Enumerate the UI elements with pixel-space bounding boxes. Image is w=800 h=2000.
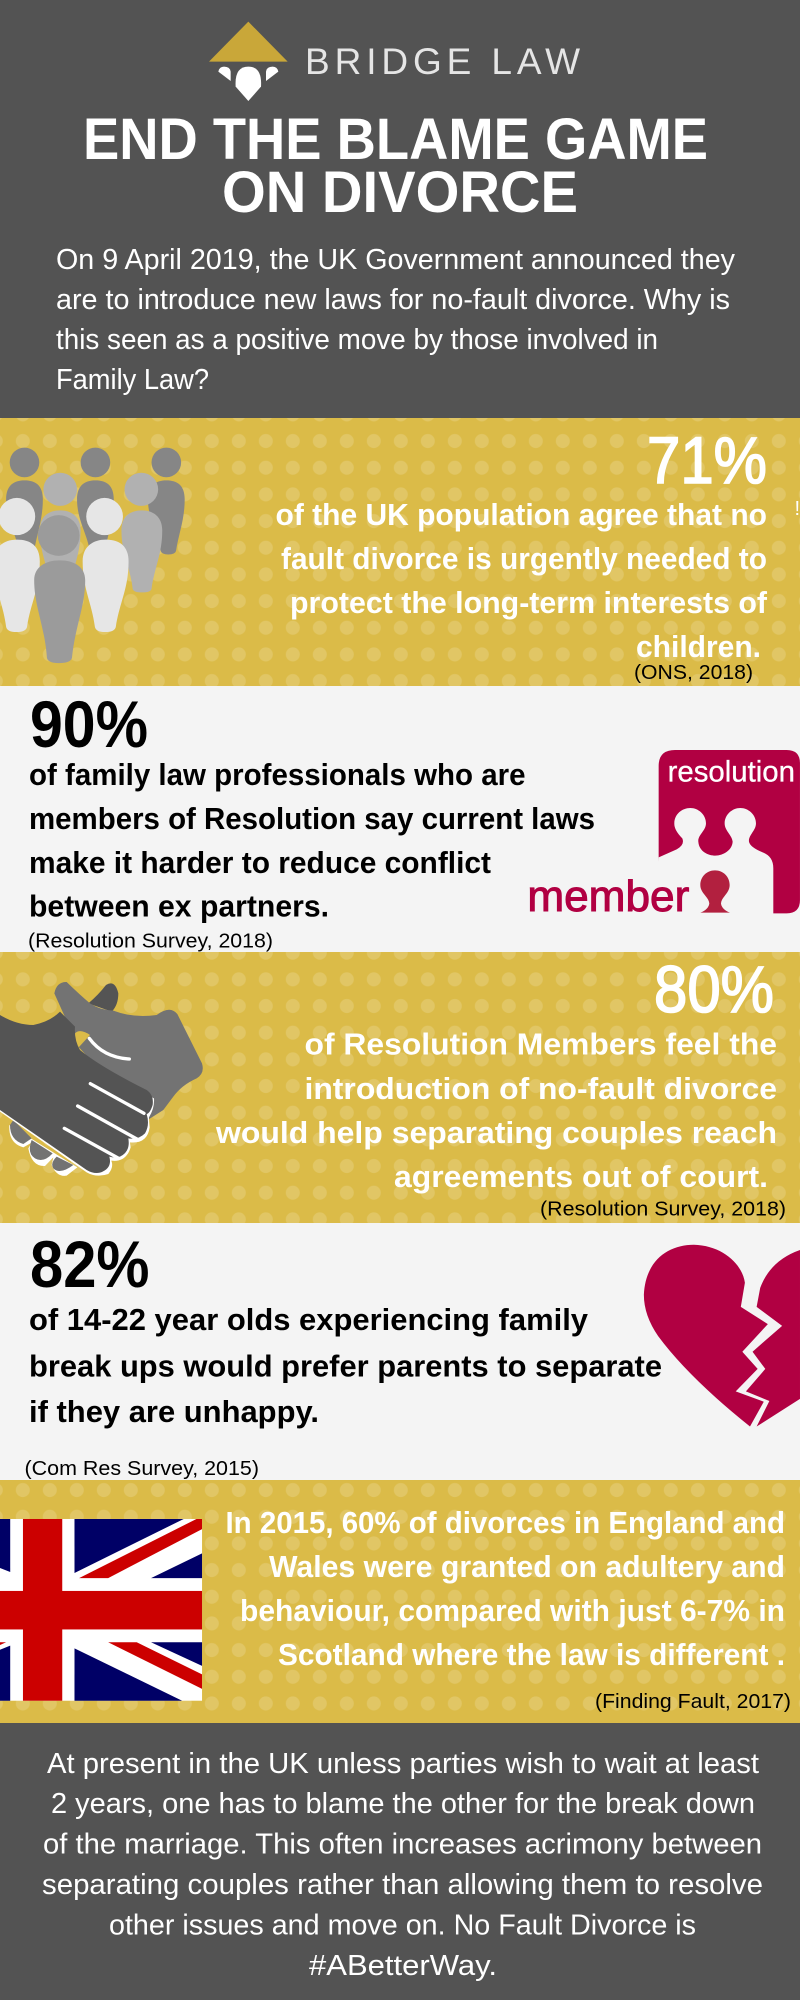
closing text: At present in the UK unless parties wish to wait at least <box>47 1748 759 1780</box>
source: Finding Fault: (Finding Fault, 2017) <box>595 1691 791 1713</box>
brand name: BRIDGE LAW <box>305 41 580 82</box>
intro text: On 9 April 2019, the UK Government announced they <box>56 244 735 276</box>
statistic description: introduction of no-fault divorce <box>304 1071 777 1106</box>
stray mark: ! <box>794 498 800 520</box>
statistic description: protect the long-term interests of <box>290 585 768 620</box>
statistic description: behaviour, compared with just 6-7% in <box>240 1593 785 1628</box>
source: Resolution Survey: (Resolution Survey, 2018) <box>540 1198 786 1220</box>
closing text: other issues and move on. No Fault Divorce is <box>109 1910 696 1942</box>
closing text: #ABetterWay. <box>309 1950 497 1982</box>
statistic description: fault divorce is urgently needed to <box>281 541 767 576</box>
title: ON DIVORCE <box>222 160 578 225</box>
statistic description: of Resolution Members feel the <box>304 1026 777 1062</box>
title <box>83 107 708 225</box>
closing text: separating couples rather than allowing them to resolve <box>42 1869 763 1901</box>
intro text: Family Law? <box>56 364 209 396</box>
icon: handshake <box>0 982 203 1176</box>
panel: 80% Resolution members <box>0 952 800 1223</box>
panel: divorces in England and Wales <box>0 1480 800 1723</box>
source: Resolution Survey: (Resolution Survey, 2018) <box>28 930 273 952</box>
statistic: 80%: 80% <box>654 952 774 1026</box>
statistic: 82%: 82% <box>30 1227 150 1301</box>
statistic description <box>29 1302 662 1429</box>
icon: Resolution member logo: member <box>527 873 689 921</box>
source: Com Res Survey: (Com Res Survey, 2015) <box>24 1458 259 1480</box>
statistic description: Wales were granted on adultery and <box>269 1549 785 1584</box>
statistic description: would help separating couples reach <box>215 1115 777 1150</box>
panel: header <box>0 0 800 418</box>
icon: Resolution member logo: resolution <box>668 756 795 789</box>
panel: 90% family law professionals <box>0 686 800 952</box>
icon: Union Jack flag <box>0 1519 202 1701</box>
panel: 82% young people <box>0 1223 800 1480</box>
icon: Resolution member logo <box>527 750 800 921</box>
statistic description: children. <box>636 629 761 664</box>
statistic description: of 14-22 year olds experiencing family <box>29 1302 589 1337</box>
icon: broken heart <box>644 1245 800 1427</box>
statistic description <box>226 1505 785 1672</box>
statistic description <box>215 1026 777 1194</box>
icon: Bridge Law logo <box>209 22 288 101</box>
intro text: are to introduce new laws for no-fault divorce. Why is <box>56 284 730 316</box>
statistic description: break ups would prefer parents to separate <box>29 1348 662 1384</box>
closing text: of the marriage. This often increases acrimony between <box>43 1828 762 1860</box>
closing text <box>42 1748 763 1982</box>
statistic description <box>276 497 768 664</box>
statistic description: members of Resolution say current laws <box>29 801 595 836</box>
statistic description: Scotland where the law is different . <box>278 1637 785 1672</box>
statistic description: of the UK population agree that no <box>276 497 767 532</box>
intro text <box>56 244 735 396</box>
statistic description: make it harder to reduce conflict <box>29 845 491 880</box>
panel: footer <box>0 1723 800 2000</box>
statistic description: between ex partners. <box>29 888 329 924</box>
closing text: 2 years, one has to blame the other for the break down <box>51 1788 755 1820</box>
statistic description: agreements out of court. <box>394 1159 768 1194</box>
statistic description: if they are unhappy. <box>29 1394 319 1429</box>
statistic description: In 2015, 60% of divorces in England and <box>226 1505 785 1540</box>
source: ONS: (ONS, 2018) <box>634 662 753 684</box>
statistic description: of family law professionals who are <box>29 757 526 792</box>
title: END THE BLAME GAME <box>83 107 708 172</box>
icon: group of people <box>0 448 185 663</box>
statistic description <box>29 757 595 924</box>
statistic: 71%: 71% <box>647 423 767 497</box>
panel: 71% UK population <box>0 418 800 686</box>
statistic: 90%: 90% <box>30 687 148 761</box>
intro text: this seen as a positive move by those involved in <box>56 324 658 356</box>
